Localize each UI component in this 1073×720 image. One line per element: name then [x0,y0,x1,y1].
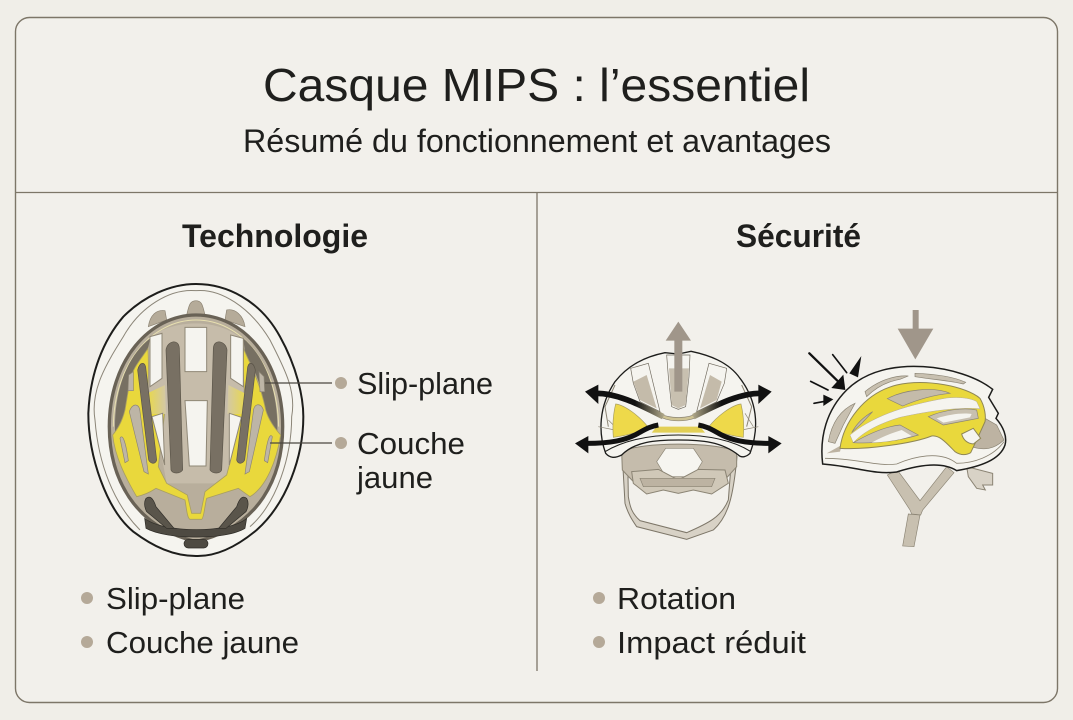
rear strap and dial [145,518,247,537]
illustration: helmet side view with impact arrows [809,310,1006,547]
grey arrow up [666,322,691,392]
callout: Slip-plane [265,367,493,401]
black arrows [596,393,663,417]
vents and bands [887,390,950,406]
illustration: helmet front view with rotation arrows [575,322,782,539]
dark pads [138,342,255,473]
white vents [150,327,243,466]
list: technology bullets: Slip-plane [106,582,245,616]
list: safety bullets: Impact réduit [617,626,807,660]
shell [822,366,1006,473]
list: technology bullets: Couche jaune [106,626,299,660]
straps [622,457,737,539]
list: safety bullets [593,582,807,660]
yellow layer [840,383,985,455]
shell [601,351,756,457]
heading: Sécurité: Sécurité [736,218,861,254]
illustration: helmet interior, top view [88,284,303,556]
black impact arrows [809,353,861,406]
subtitle: Résumé du fonctionnement et avantages [243,123,831,159]
callout: Couche jaune [270,427,465,495]
straps [887,467,954,515]
callout: Slip-plane: Slip-plane [357,367,493,401]
list: technology bullets [81,582,299,660]
title: Casque MIPS : l’essentiel [263,59,810,111]
grey arrow down [898,310,933,359]
list: safety bullets: Rotation [617,582,736,616]
callout: Couche jaune: Couche [357,427,465,461]
heading: Technologie: Technologie [182,218,368,254]
yellow layer [113,348,281,519]
callout: Couche jaune: jaune [356,461,433,495]
yellow sections [613,404,648,437]
